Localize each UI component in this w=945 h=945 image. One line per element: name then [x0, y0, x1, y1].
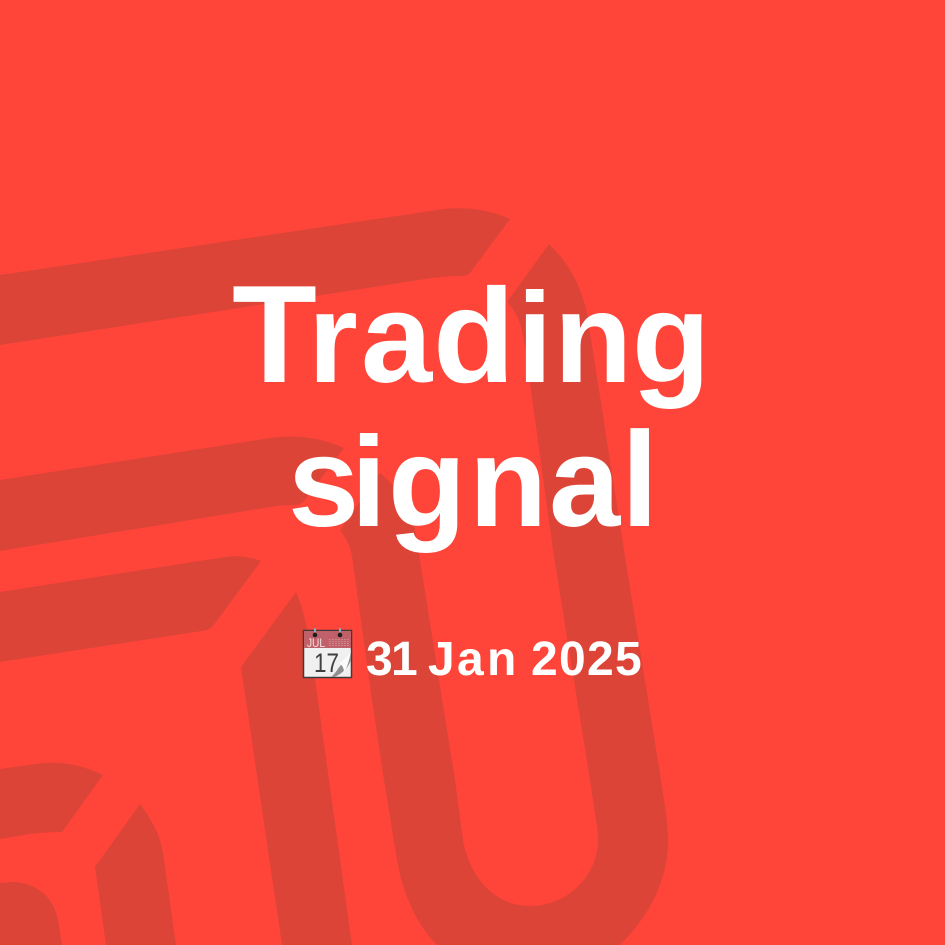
calendar header — [304, 631, 351, 648]
title line 2: l — [621, 404, 659, 555]
large U stroke — [340, 244, 668, 945]
title line 1: d — [433, 262, 515, 411]
title line 1: r — [308, 267, 358, 410]
corner arrow stem — [0, 882, 62, 945]
fourth arrow band — [0, 763, 103, 839]
title line 2: n — [469, 411, 547, 554]
fourth arrow stem — [95, 804, 176, 945]
calendar day: 17 — [314, 648, 339, 678]
title line 1: n — [554, 267, 632, 410]
second arrow band — [0, 436, 344, 551]
calendar ring left — [313, 628, 317, 637]
title line 2: g — [388, 411, 466, 554]
title line 1: g — [632, 267, 710, 410]
title line 2: i — [351, 411, 387, 554]
third arrow stem — [241, 592, 352, 945]
title line 2: a — [549, 411, 621, 554]
title line 1: T — [232, 257, 317, 412]
calendar ring right — [338, 628, 342, 637]
calendar tick marks — [330, 639, 348, 647]
title line 1: i — [517, 267, 553, 410]
title — [232, 257, 710, 555]
date: 31 Jan 2025 — [366, 633, 642, 686]
calendar month: JUL — [307, 638, 326, 650]
title line 2: s — [288, 411, 359, 554]
calendar curl highlight — [339, 650, 351, 672]
calendar page curl — [331, 650, 351, 677]
watermark logo arrows — [0, 208, 668, 945]
top arrow band — [0, 208, 510, 345]
calendar page — [304, 630, 352, 678]
third arrow band — [0, 556, 261, 662]
title line 1: a — [361, 267, 433, 410]
icon: calendar — [304, 628, 352, 678]
